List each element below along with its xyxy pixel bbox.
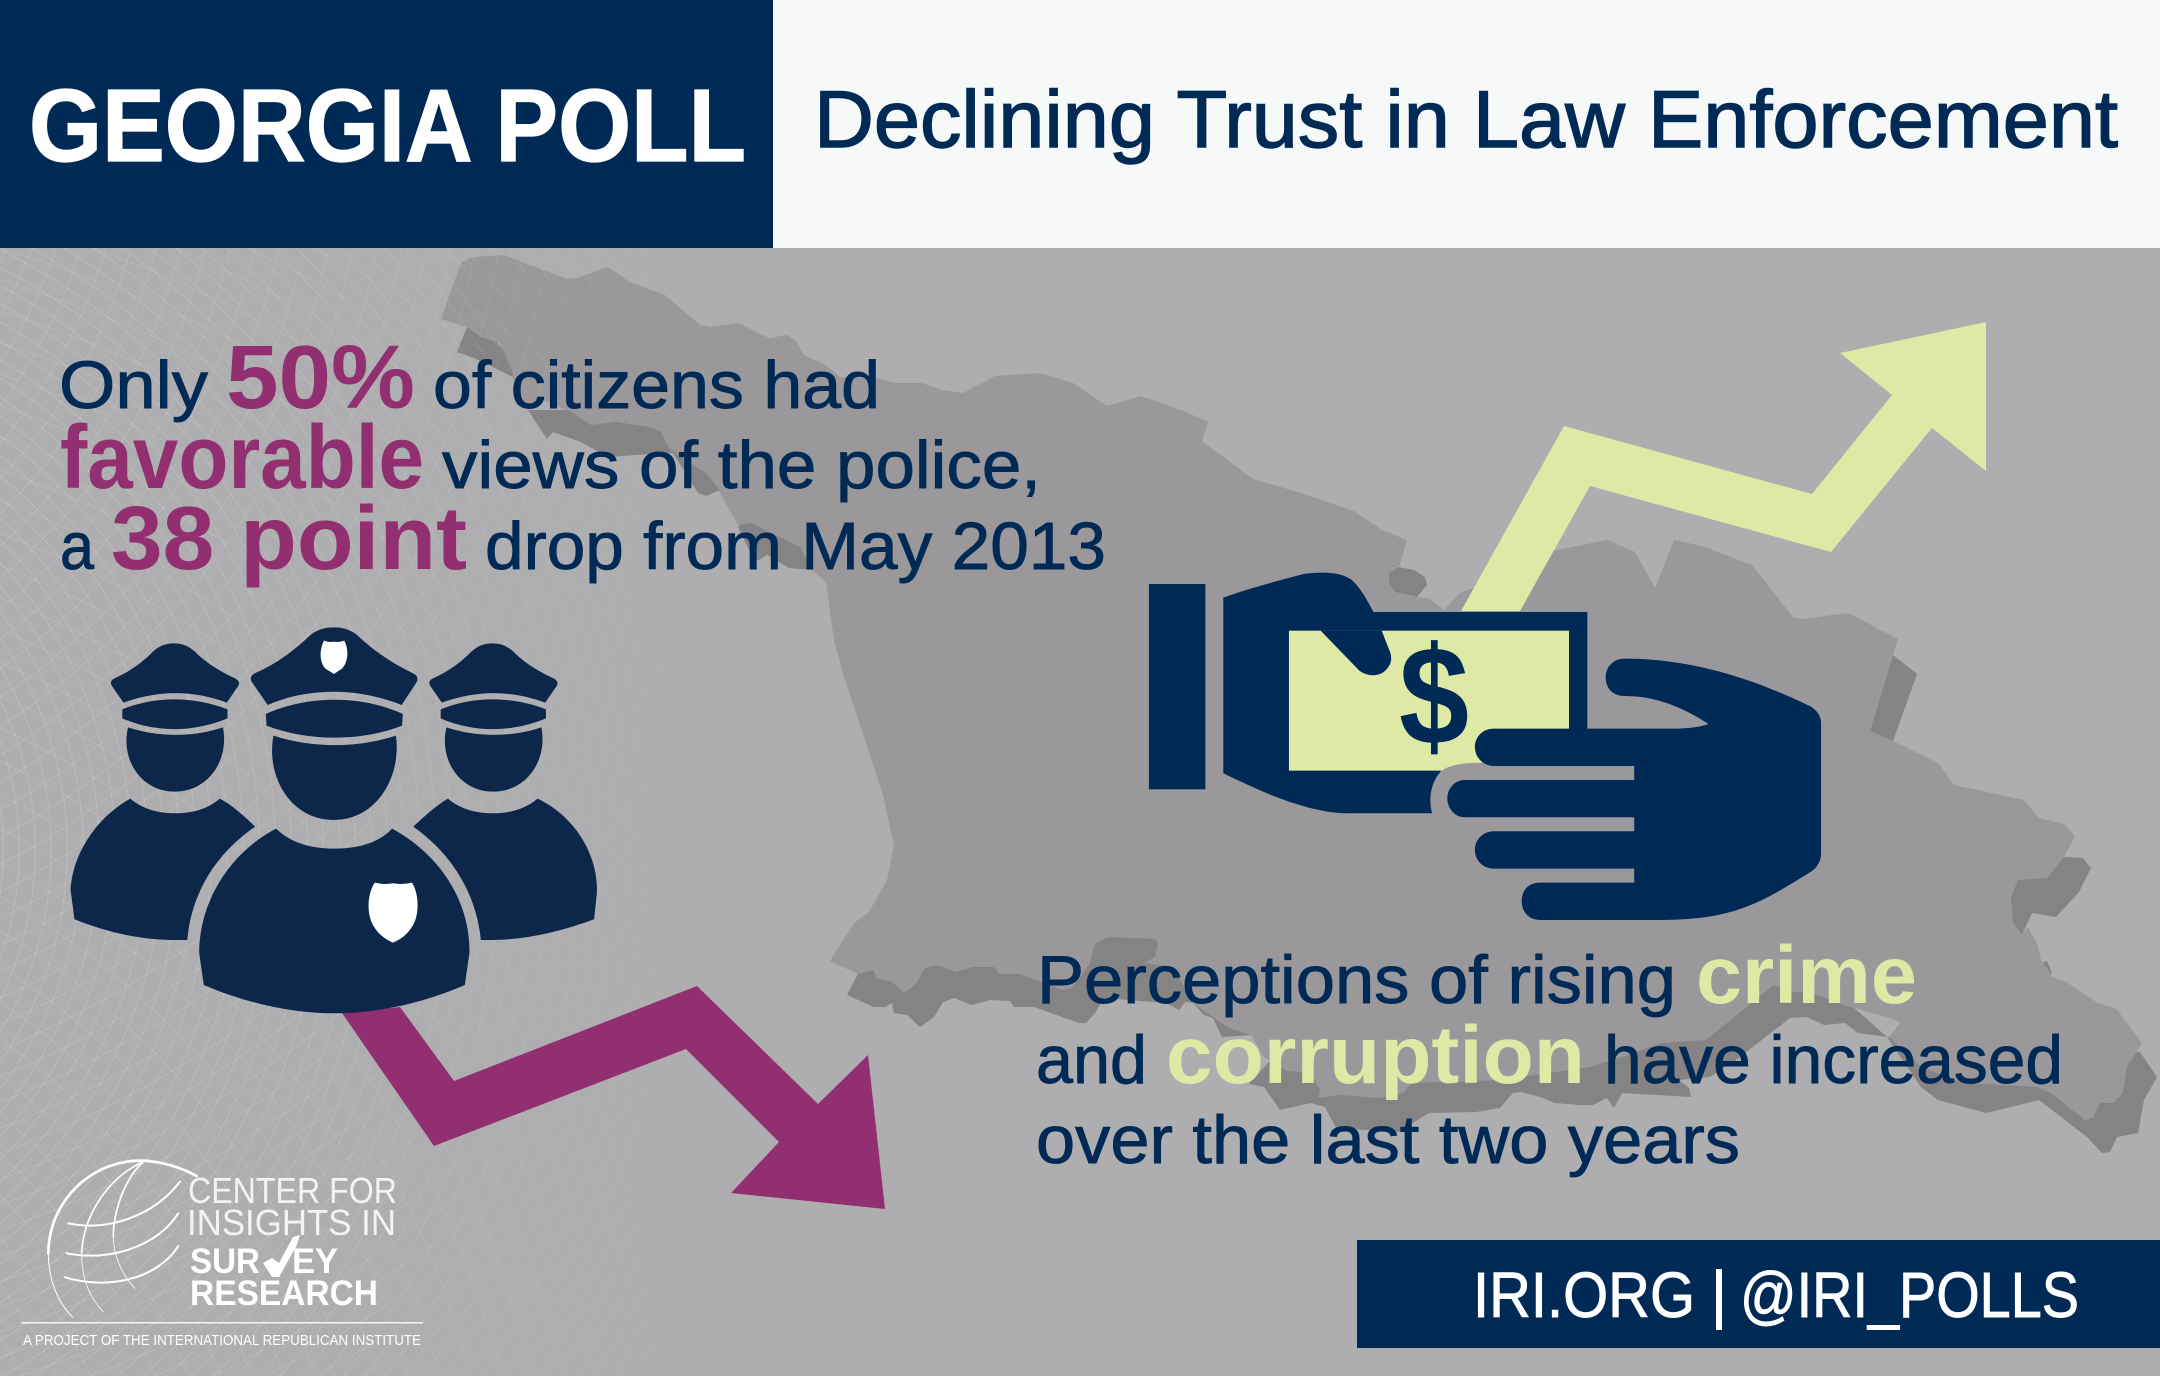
text block: police favorability: favorable <box>60 408 424 508</box>
logo: Center for Insights in Survey Research: RESEARCH <box>190 1274 378 1313</box>
icon: check mark <box>263 1235 300 1277</box>
text block: police favorability <box>59 328 1106 589</box>
arrow: rising trend <box>1461 322 1986 611</box>
icon: globe <box>48 1161 197 1317</box>
logo: Center for Insights in Survey Research: A PROJECT OF THE INTERNATIONAL REPUBLICAN INSTITUTE <box>23 1333 421 1349</box>
text block: crime and corruption: Perceptions of rising <box>1037 942 1676 1018</box>
arrow: falling trend <box>342 986 885 1209</box>
logo: Center for Insights in Survey Research: CENTER FOR <box>188 1170 397 1211</box>
text block: crime and corruption <box>1036 930 2063 1178</box>
footer bar: website and handle: @IRI_POLLS <box>1740 1259 2079 1331</box>
logo: Center for Insights in Survey Research: SUR <box>190 1242 260 1281</box>
icon: hands exchanging money <box>1149 573 1821 920</box>
text block: crime and corruption: and <box>1036 1022 1147 1098</box>
text block: police favorability: of citizens had <box>433 348 880 423</box>
title: GEORGIA POLL <box>29 68 746 183</box>
header <box>0 0 2160 248</box>
text block: crime and corruption: over the last two years <box>1036 1102 1740 1178</box>
text block: police favorability: Only <box>59 348 209 423</box>
icon: three police officers <box>71 627 597 1013</box>
map of Georgia <box>441 255 2157 1153</box>
footer bar: website and handle: IRI.ORG <box>1473 1259 1695 1331</box>
text block: police favorability: a <box>60 509 95 584</box>
text block: crime and corruption: crime <box>1696 930 1917 1021</box>
icon: dollar sign: $ <box>1399 617 1469 774</box>
text block: police favorability: drop from May 2013 <box>485 509 1106 584</box>
text block: crime and corruption: corruption <box>1166 1010 1585 1101</box>
text block: police favorability: 50% <box>226 328 415 428</box>
logo: Center for Insights in Survey Research <box>21 1161 423 1349</box>
logo: Center for Insights in Survey Research: EY <box>292 1242 338 1281</box>
subtitle: Declining Trust in Law Enforcement <box>814 75 2118 165</box>
text block: police favorability: 38 point <box>111 489 467 589</box>
footer bar: website and handle <box>1357 1240 2160 1348</box>
logo: Center for Insights in Survey Research: INSIGHTS IN <box>187 1202 396 1243</box>
text block: police favorability: views of the police, <box>442 428 1041 503</box>
text block: crime and corruption: have increased <box>1604 1022 2063 1098</box>
